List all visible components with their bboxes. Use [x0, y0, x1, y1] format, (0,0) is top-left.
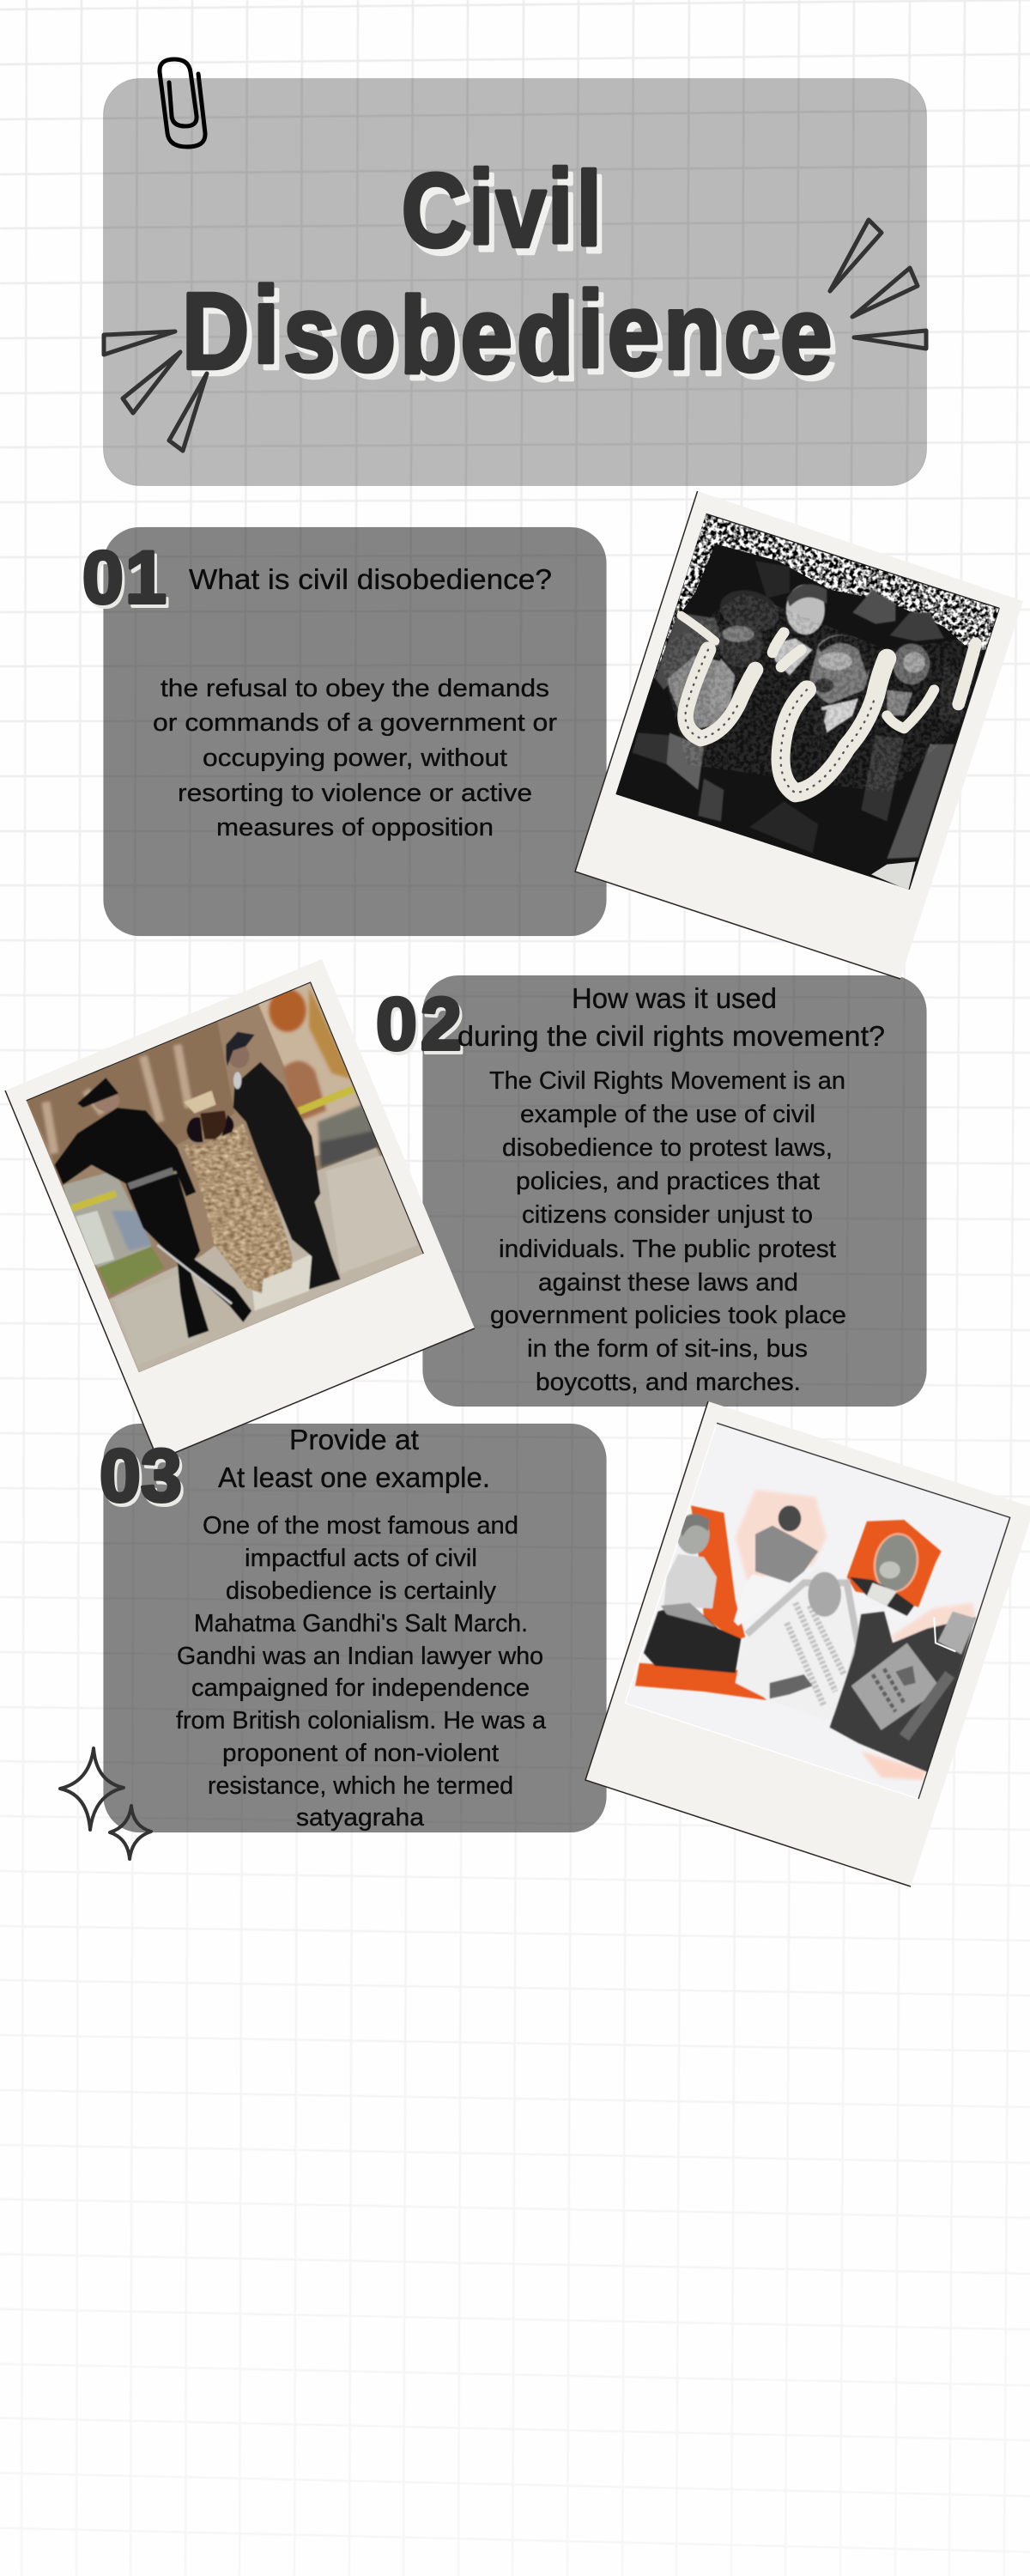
- heading: how was it used: during the civil rights movement?: [457, 1020, 885, 1052]
- text block: salt march example: One of the most famous and: [203, 1512, 518, 1540]
- road: [109, 1148, 423, 1372]
- text block: civil rights movement: citizens consider unjust to: [522, 1201, 813, 1229]
- number 03: 03: [100, 1435, 182, 1517]
- woman: [183, 1123, 293, 1294]
- text block: civil rights movement: government policies took place: [490, 1302, 846, 1329]
- text block: civil rights movement: boycotts, and marches.: [536, 1369, 801, 1396]
- center man: [809, 635, 869, 704]
- heading: provide at least one example: [218, 1424, 490, 1493]
- text block: civil rights movement: example of the use of civil: [520, 1101, 815, 1128]
- text block: salt march example: satyagraha: [296, 1804, 425, 1832]
- number 01: 01: [85, 540, 169, 623]
- hats: [852, 590, 895, 624]
- Mandela: [872, 1532, 920, 1594]
- text block: definition: occupying power, without: [203, 744, 507, 772]
- woman at desk: [676, 1514, 710, 1554]
- number 02: 02: [376, 983, 462, 1066]
- boxer: [755, 1526, 818, 1583]
- text block: civil rights movement: The Civil Rights Movement is an: [489, 1067, 845, 1095]
- text block: definition: or commands of a government or: [153, 709, 557, 737]
- Gandhi: [735, 1636, 848, 1716]
- crowd and sign: [830, 1612, 976, 1773]
- title word shadow: Civil: Civil: [407, 155, 607, 276]
- photo: marchers wearing garlands: [615, 513, 1000, 890]
- heading: how was it used: How was it used: [572, 982, 777, 1014]
- text block: salt march example: Gandhi was an Indian lawyer who: [177, 1643, 543, 1670]
- garlands: [681, 616, 976, 793]
- right man: [893, 643, 930, 684]
- title word: Disobedience: Disobedience: [182, 264, 832, 397]
- title: [182, 149, 837, 403]
- heading: provide at least one example: At least one example.: [218, 1461, 490, 1493]
- panel: title: [103, 79, 927, 486]
- left man hat and face: [720, 590, 779, 632]
- right officer: [233, 1062, 341, 1290]
- number 03: 03: [102, 1438, 185, 1521]
- text block: civil rights movement: against these laws and: [538, 1269, 798, 1297]
- heading: how was it used: [457, 982, 885, 1052]
- text block: salt march example: [176, 1512, 547, 1832]
- photo: protester escorted by officers: [17, 970, 429, 1382]
- heading: what is civil disobedience: What is civil disobedience?: [189, 563, 552, 595]
- tape: [299, 1089, 354, 1111]
- photo: Gandhi collage: [625, 1423, 1010, 1799]
- title word: Civil: Civil: [402, 149, 602, 270]
- icon: burst lines left: [104, 331, 207, 451]
- heading: provide at least one example: Provide at: [289, 1424, 419, 1455]
- text block: civil rights movement: individuals. The public protest: [499, 1236, 836, 1263]
- text block: civil rights movement: policies, and practices that: [516, 1168, 820, 1195]
- polaroid: collage of activists: [585, 1401, 1030, 1886]
- panel: section 3: [103, 1424, 606, 1832]
- text block: salt march example: disobedience is certainly: [226, 1577, 496, 1605]
- number 02: 02: [379, 987, 464, 1069]
- polaroid: crowd with garlands: [575, 491, 1023, 979]
- icon: sparkles: [60, 1748, 151, 1859]
- left officer: [54, 1108, 196, 1196]
- title word shadow: Disobedience: Disobedience: [187, 270, 837, 403]
- text block: salt march example: campaigned for independence: [191, 1674, 530, 1702]
- orange shapes: [691, 1505, 745, 1640]
- upper man: [786, 585, 825, 635]
- panel: section 2: [422, 975, 927, 1406]
- text block: civil rights movement: disobedience to protest laws,: [502, 1134, 833, 1162]
- polaroid: arrest by police: [5, 959, 475, 1460]
- text block: salt march example: proponent of non-violent: [222, 1740, 499, 1767]
- icon: burst lines right: [830, 220, 926, 349]
- text block: definition: [153, 675, 557, 841]
- text block: definition: the refusal to obey the demands: [161, 675, 549, 702]
- text block: definition: resorting to violence or active: [178, 780, 532, 807]
- text block: definition: measures of opposition: [216, 814, 494, 841]
- text block: salt march example: from British colonialism. He was a: [176, 1707, 547, 1735]
- text block: salt march example: impactful acts of civil: [245, 1545, 477, 1572]
- text block: salt march example: Mahatma Gandhi's Salt March.: [194, 1610, 528, 1637]
- text block: civil rights movement: [489, 1067, 846, 1396]
- text block: civil rights movement: in the form of sit-ins, bus: [527, 1335, 808, 1363]
- icon: paperclip: [160, 59, 205, 147]
- panel: section 1: [103, 527, 606, 936]
- number 01: 01: [82, 537, 167, 619]
- text block: salt march example: resistance, which he termed: [208, 1772, 513, 1800]
